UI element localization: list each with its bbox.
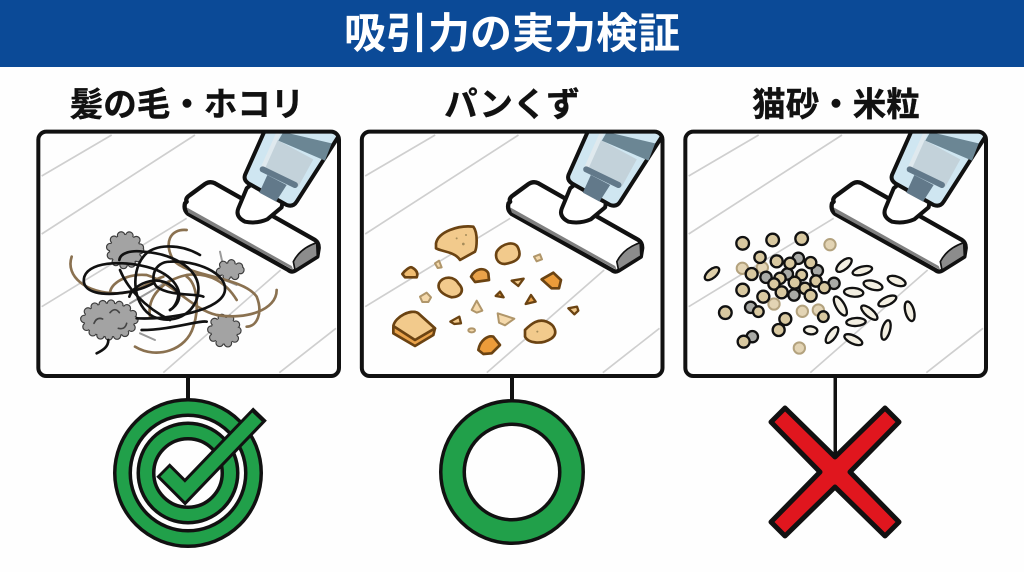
panel frame: [38, 132, 339, 376]
heading: bread crumbs: パンくず: [444, 87, 580, 124]
icon: double circle with check (excellent): [122, 408, 260, 538]
panel: bread crumbs: [362, 130, 662, 376]
panel frame: [685, 132, 986, 376]
heading: cat litter and rice: 猫砂・米粒: [752, 87, 920, 124]
panel: cat litter and rice: [685, 130, 986, 376]
connector: crumbs panel to rating: [510, 376, 514, 402]
icon: red cross (poor): [771, 376, 899, 536]
title banner: 吸引力の実力検証: [344, 10, 680, 57]
debris: dust and hair: [70, 230, 277, 353]
debris: litter and rice: [703, 232, 916, 354]
icon: circle (good): [452, 412, 572, 532]
debris: crumbs: [393, 226, 578, 354]
panel: hair and dust: [38, 130, 339, 376]
title banner: [0, 0, 1024, 67]
heading: hair and dust: 髪の毛・ホコリ: [70, 87, 304, 124]
connector: hair panel to rating: [186, 376, 190, 402]
panel frame: [362, 132, 662, 376]
